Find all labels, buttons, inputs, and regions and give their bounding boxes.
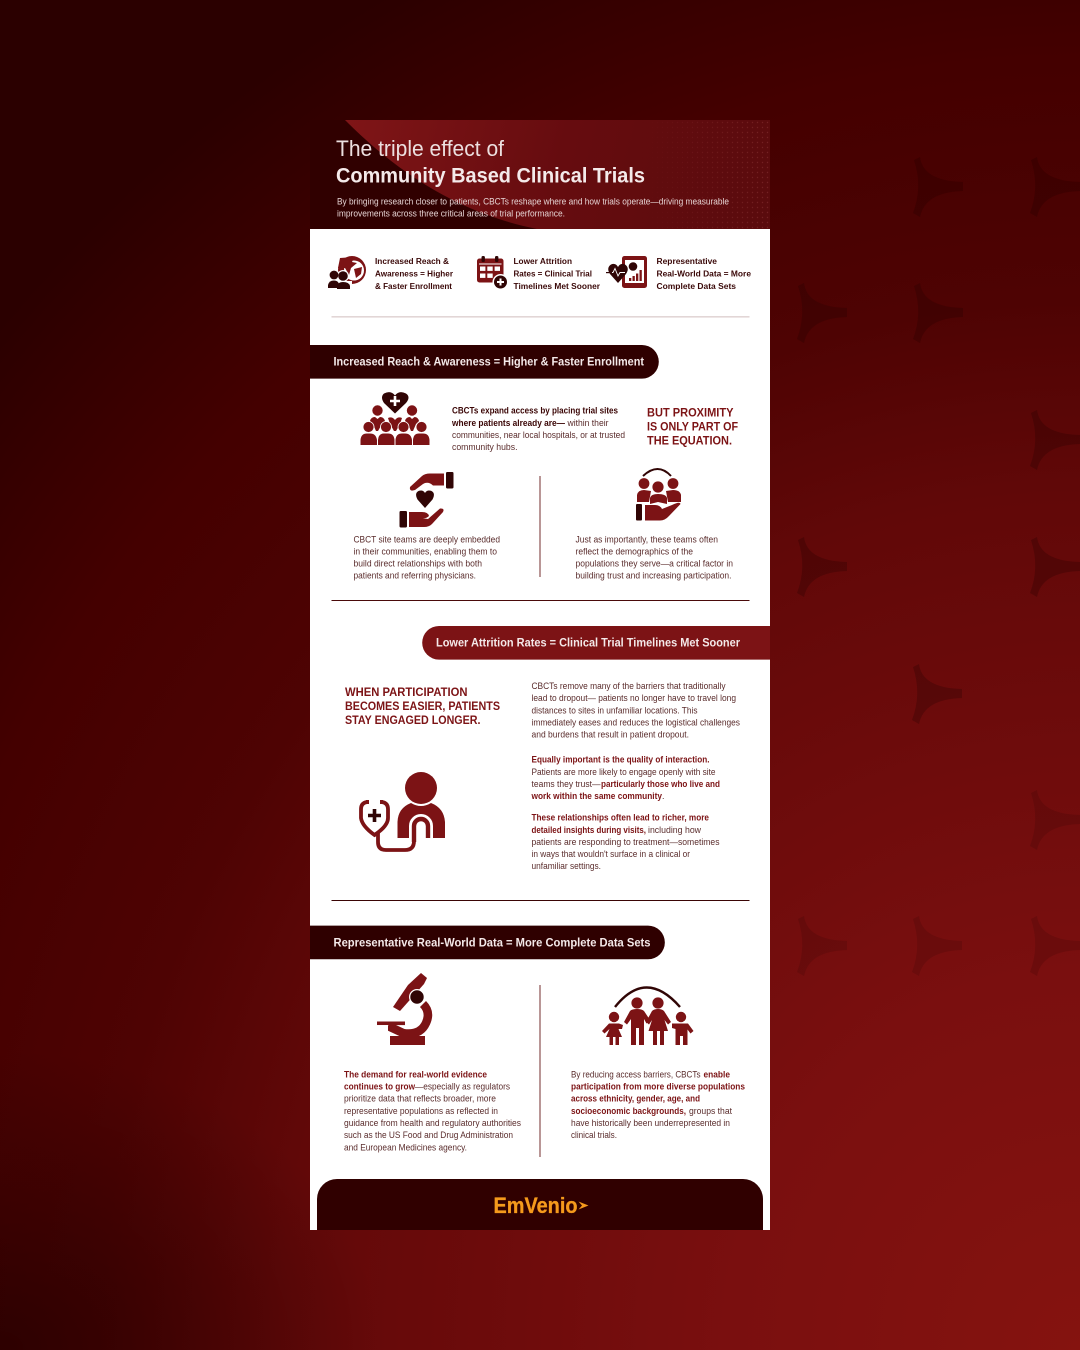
label: lower attrition (514, 256, 601, 291)
text: diverse populations: socioeconomic backgrounds, (571, 1106, 686, 1116)
header intro text: By bringing research closer to patients, CBCTs reshape where and how trials operate—driving measurable (337, 196, 729, 206)
callout: but proximity (647, 406, 738, 447)
infographic canvas (310, 120, 1080, 1230)
label: lower attrition: Lower Attrition (514, 256, 572, 266)
panel: header banner (310, 120, 770, 229)
text: expand access: where patients already are— (451, 418, 565, 428)
icon: people held by hand (636, 469, 681, 520)
text: expand access: communities, near local hospitals, or at trusted (452, 430, 625, 440)
text: reflect demographics: building trust and increasing participation. (576, 570, 732, 580)
text: demand for real-world evidence: and European Medicines agency. (344, 1142, 467, 1152)
text: barriers: immediately eases and reduces the logistical challenges (532, 718, 741, 728)
icon: calendar with plus (477, 256, 508, 290)
section 3 heading pill (310, 926, 665, 959)
text: reflect demographics: populations they serve—a critical factor in (576, 558, 733, 568)
callout: but proximity: BUT PROXIMITY (647, 406, 734, 420)
callout: but proximity: THE EQUATION. (647, 433, 732, 447)
header intro text: improvements across three critical areas of trial performance. (337, 209, 565, 219)
text: demand for real-world evidence: continues to grow (344, 1082, 415, 1092)
text: barriers (532, 681, 741, 740)
callout: but proximity: IS ONLY PART OF (647, 420, 738, 434)
text: diverse populations: By reducing access barriers, CBCTs (571, 1069, 701, 1079)
section 1 heading pill (310, 345, 659, 379)
text: demand for real-world evidence: representative populations as reflected in (344, 1106, 498, 1116)
text: demand for real-world evidence: —especially as regulators (415, 1082, 511, 1092)
text: demand for real-world evidence: such as the US Food and Drug Administration (344, 1130, 513, 1140)
footer band with logo: EmVenio (494, 1193, 578, 1218)
label: increased reach: Awareness = Higher (375, 268, 454, 278)
label: increased reach: Increased Reach & (375, 256, 449, 266)
text: expand access: community hubs. (452, 442, 518, 452)
header intro text (337, 196, 729, 219)
label: representative data: Representative (656, 256, 717, 266)
section 2 heading pill: Lower Attrition Rates = Clinical Trial Timelines Met Sooner (436, 638, 740, 650)
text: diverse populations: have historically been underrepresented in (571, 1118, 730, 1128)
icon: family under arc (602, 988, 694, 1045)
text: reflect demographics: Just as importantly, these teams often (576, 534, 718, 544)
title: The triple effect of (336, 136, 505, 161)
text: expand access (451, 406, 625, 452)
label: representative data: Real-World Data = More (656, 268, 751, 278)
label: representative data (656, 256, 751, 291)
text: reflect demographics (576, 534, 733, 580)
text: quality of interaction: Patients are more likely to engage openly with site (532, 767, 716, 777)
section 1 heading pill: Increased Reach & Awareness = Higher & Faster Enrollment (334, 356, 644, 368)
background triangle pattern (797, 157, 1080, 976)
text: expand access: within their (567, 418, 609, 428)
icon: globe and people (326, 256, 366, 290)
text: barriers: CBCTs remove many of the barriers that traditionally (532, 681, 726, 691)
text: site teams embedded: build direct relationships with both (354, 558, 482, 568)
text: richer insights: These relationships often lead to richer, more (532, 813, 709, 823)
text: barriers: and burdens that result in patient dropout. (532, 730, 689, 740)
text: quality of interaction: work within the same community (531, 791, 662, 801)
text: diverse populations: groups that (689, 1106, 733, 1116)
label: increased reach: & Faster Enrollment (375, 281, 452, 291)
text: barriers: distances to sites in unfamiliar locations. This (532, 705, 698, 715)
icon: tablet with heart and chart (606, 256, 647, 288)
text: site teams embedded: CBCT site teams are deeply embedded (354, 534, 500, 544)
text: barriers: lead to dropout— patients no longer have to travel long (532, 693, 736, 703)
section 2 heading pill (422, 626, 770, 660)
text: quality of interaction (531, 755, 720, 801)
icon: hands holding heart (400, 472, 454, 528)
footer band with logo (317, 1179, 763, 1230)
icon: patient and stethoscope (361, 772, 445, 850)
callout: when participation: BECOMES EASIER, PATIENTS (345, 699, 500, 713)
text: quality of interaction: Equally important is the quality of interaction. (532, 755, 710, 765)
text: diverse populations: clinical trials. (571, 1130, 617, 1140)
text: richer insights: detailed insights during visits, (532, 825, 646, 835)
text: richer insights (532, 813, 720, 871)
icon: community crowd with heart (360, 392, 430, 445)
label: representative data: Complete Data Sets (656, 281, 736, 291)
text: richer insights: in ways that wouldn't surface in a clinical or (532, 849, 690, 859)
section 3 heading pill: Representative Real-World Data = More Complete Data Sets (334, 938, 650, 950)
title: Community Based Clinical Trials (336, 164, 645, 188)
panel: white infographic body (310, 229, 770, 1230)
text: quality of interaction: . (662, 791, 664, 801)
text: diverse populations: across ethnicity, gender, age, and (571, 1094, 700, 1104)
text: quality of interaction: teams they trust— (532, 779, 601, 789)
label: increased reach (375, 256, 454, 291)
callout: when participation (345, 685, 500, 727)
text: demand for real-world evidence: guidance from health and regulatory authorities (344, 1118, 522, 1128)
text: diverse populations: participation from more diverse populations (571, 1082, 745, 1092)
text: site teams embedded: in their communities, enabling them to (354, 546, 497, 556)
text: site teams embedded: patients and referring physicians. (354, 570, 476, 580)
callout: when participation: WHEN PARTICIPATION (345, 685, 468, 699)
text: demand for real-world evidence: prioritize data that reflects broader, more (344, 1094, 496, 1104)
text: richer insights: patients are responding to treatment—sometimes (532, 837, 720, 847)
text: richer insights: unfamiliar settings. (532, 861, 601, 871)
callout: when participation: STAY ENGAGED LONGER. (345, 713, 480, 727)
text: expand access: CBCTs expand access by placing trial sites (452, 406, 618, 416)
text: quality of interaction: particularly those who live and (601, 779, 720, 789)
icon: microscope (377, 973, 428, 1045)
text: diverse populations (571, 1069, 745, 1140)
text: reflect demographics: reflect the demographics of the (576, 546, 693, 556)
text: demand for real-world evidence: The demand for real-world evidence (344, 1069, 487, 1079)
label: lower attrition: Rates = Clinical Trial (514, 268, 592, 278)
text: richer insights: including how (648, 825, 702, 835)
text: site teams embedded (354, 534, 500, 580)
label: lower attrition: Timelines Met Sooner (514, 281, 601, 291)
title (336, 136, 645, 188)
text: demand for real-world evidence (344, 1069, 522, 1152)
text: diverse populations: enable (704, 1069, 730, 1079)
